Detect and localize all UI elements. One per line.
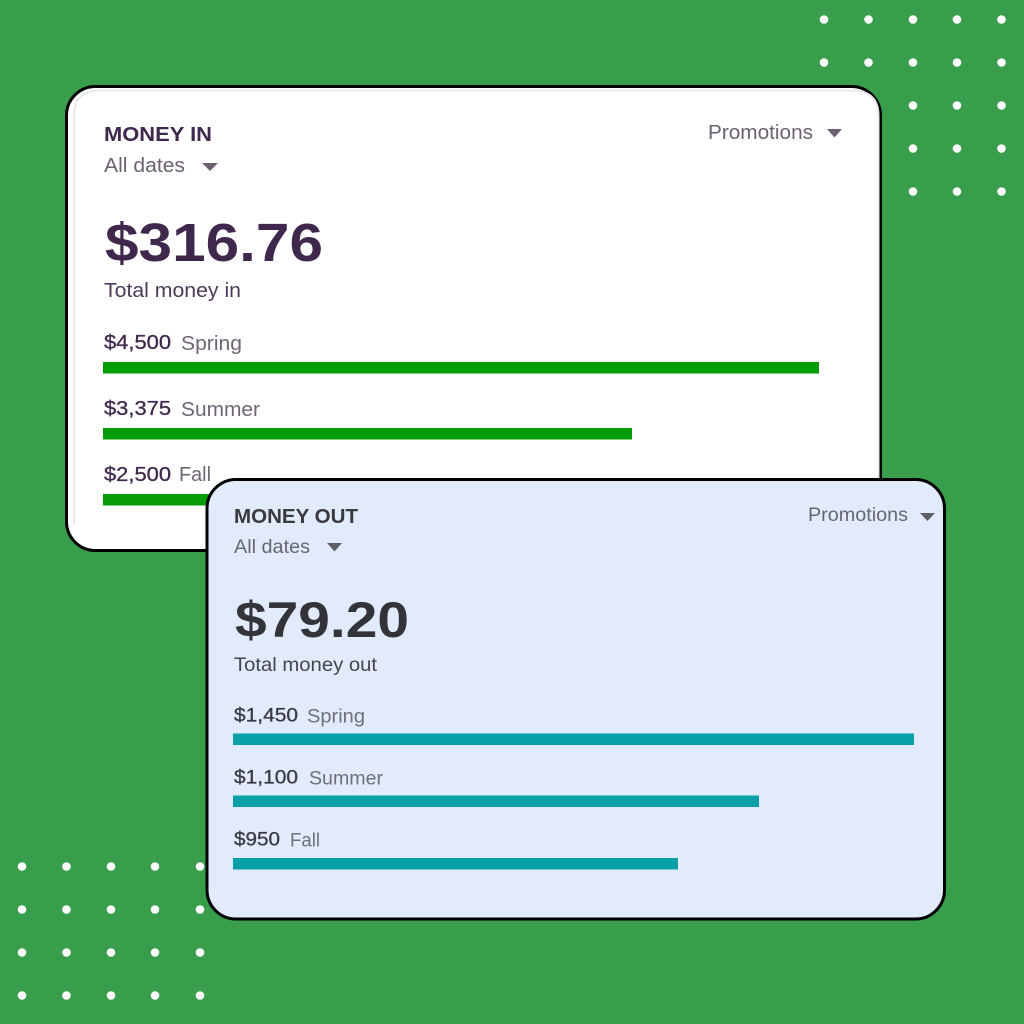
row: spring: $4,500 <box>104 332 171 354</box>
row: fall: $2,500 <box>104 464 171 486</box>
row: spring: Spring <box>181 333 242 355</box>
row: summer: Summer <box>181 399 260 421</box>
filter: promotions: Promotions <box>808 505 908 526</box>
date filter: all dates <box>234 537 342 558</box>
row: summer <box>103 398 632 440</box>
dot grid: top right <box>820 15 1006 196</box>
label: total money out: Total money out <box>234 655 378 676</box>
heading: money in: MONEY IN <box>104 124 212 146</box>
row: fall: $950 <box>234 830 280 850</box>
dot grid: bottom left <box>18 862 204 1000</box>
panel: money out <box>207 480 944 919</box>
row: spring: $1,450 <box>234 706 298 726</box>
label: total money in: Total money in <box>104 280 241 302</box>
row: fall: Fall <box>179 464 211 486</box>
row: fall <box>103 464 223 506</box>
row: spring: Spring <box>307 706 365 728</box>
row: spring <box>103 332 819 374</box>
date filter: all dates <box>104 155 218 177</box>
filter: promotions: Promotions <box>708 122 813 144</box>
date filter: all dates: All dates <box>234 537 310 558</box>
row: spring <box>233 706 914 745</box>
heading: money out: MONEY OUT <box>234 506 358 528</box>
date filter: all dates: All dates <box>104 155 185 177</box>
total amount: money out: $79.20 <box>235 592 409 648</box>
row: summer: Summer <box>309 768 384 790</box>
row: fall <box>233 830 678 870</box>
row: summer <box>233 768 759 807</box>
panel: money in <box>66 86 880 550</box>
card background: money in <box>66 86 880 550</box>
row: summer: $3,375 <box>104 398 171 420</box>
total amount: money in: $316.76 <box>105 213 323 273</box>
row: summer: $1,100 <box>234 768 298 788</box>
row: fall: Fall <box>290 830 320 852</box>
card background: money out <box>207 480 944 919</box>
